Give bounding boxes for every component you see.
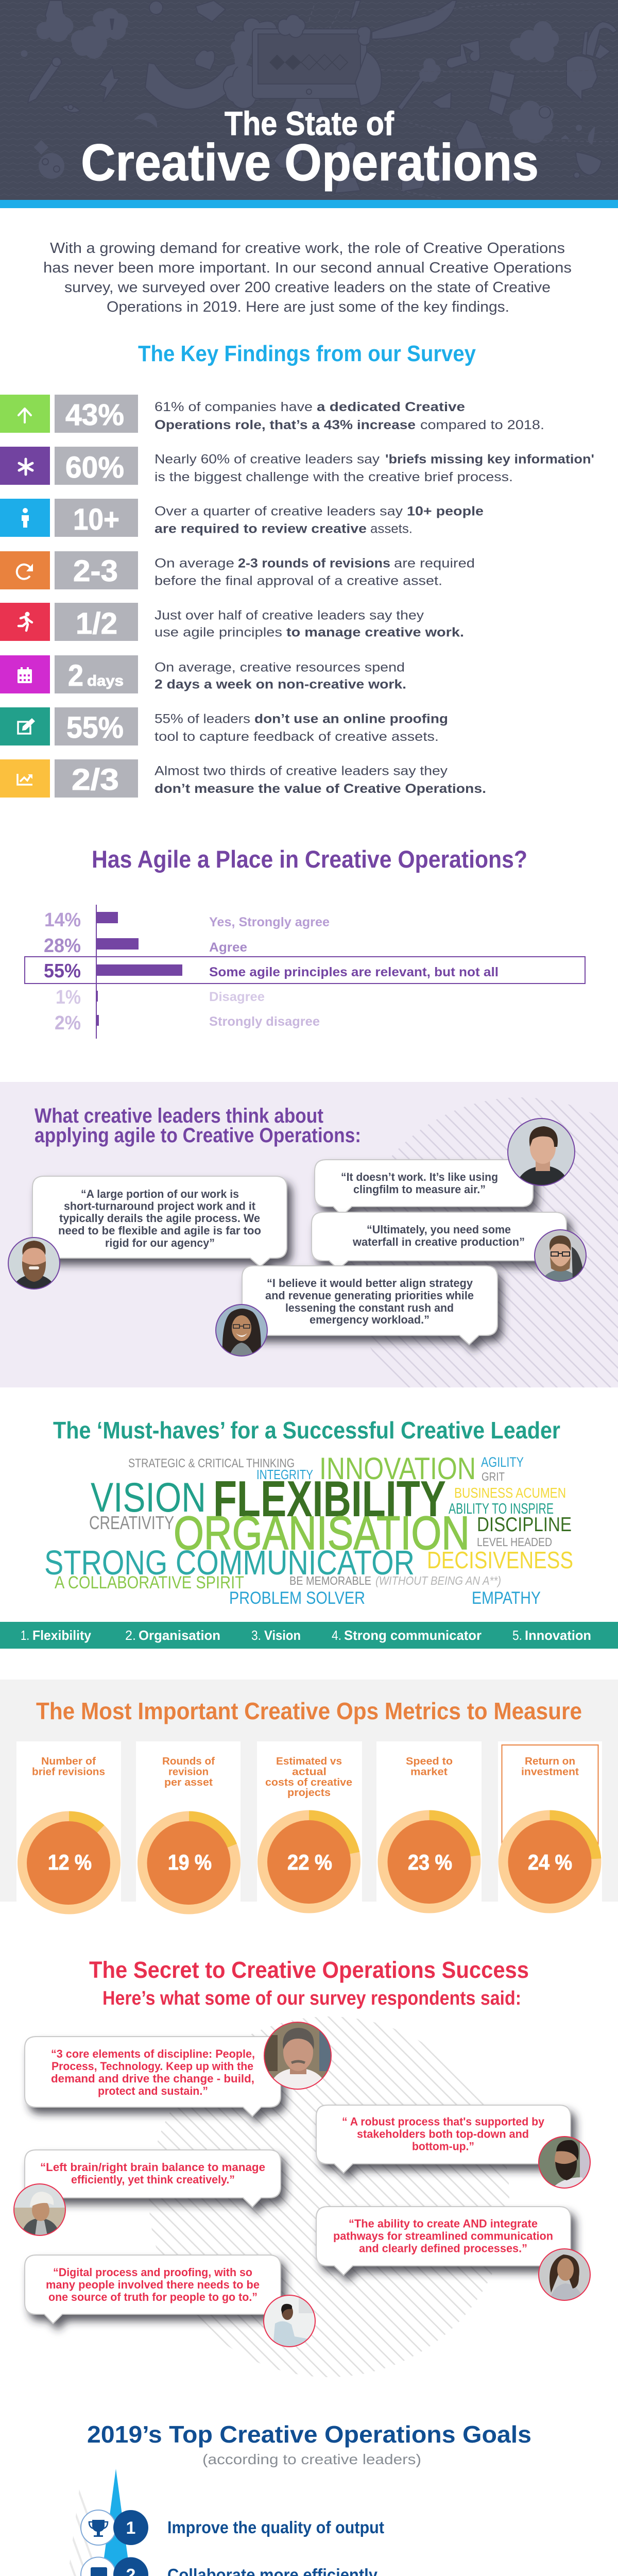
heading: secret to success: The Secret to Creative Operations Success — [89, 1957, 529, 1983]
metric: speed to market: Speed to — [406, 1756, 453, 1767]
finding 6: 2 — [68, 659, 83, 692]
quote bubble: digital process: one source of truth for people to go to.” — [48, 2291, 258, 2303]
portrait: man in cap — [14, 2184, 65, 2235]
metric: rounds of revision: revision — [168, 1766, 209, 1777]
finding 4: 2-3 rounds of revisions — [238, 556, 390, 571]
ranking bar: 5. — [512, 1628, 522, 1643]
finding 6: On average, creative resources spend — [154, 660, 405, 675]
quote bubble: discipline: Process, Technology. Keep up with the — [52, 2060, 253, 2073]
icon: up arrow — [0, 395, 50, 433]
finding 5: Just over half of creative leaders say they — [154, 608, 424, 622]
finding 4: before the final approval of a creative asset. — [154, 574, 442, 588]
finding 1: compared to 2018. — [420, 418, 544, 432]
finding 5: 1/2 — [76, 607, 117, 640]
word cloud: FLEXIBILITY — [213, 1470, 446, 1527]
dashed connector lines — [309, 4, 617, 198]
metric: estimated vs actual: costs of creative — [265, 1777, 352, 1788]
heading: goals: 2019’s Top Creative Operations Goals — [87, 2421, 531, 2448]
quote bubble: discipline — [25, 2037, 281, 2116]
panel heading: applying agile to Creative Operations: — [35, 1124, 361, 1147]
quote bubble: digital process: “Digital process and proofing, with so — [53, 2266, 252, 2279]
portrait: older man — [264, 2022, 332, 2090]
quote bubble: create and integrate: pathways for streamlined communication — [333, 2230, 553, 2242]
word cloud — [44, 1451, 573, 1608]
word cloud: (WITHOUT BEING AN A**) — [375, 1574, 501, 1587]
ranking bar: Flexibility — [32, 1628, 92, 1643]
portrait: curly-haired woman — [539, 2249, 590, 2300]
finding 1: Operations role, that’s a 43% increase — [154, 418, 416, 432]
quote bubble: clingfilm: clingfilm to measure air.” — [353, 1183, 486, 1196]
highlight box — [25, 957, 585, 984]
finding 4: On average — [154, 556, 234, 571]
metric: return on investment: 24 % — [528, 1850, 572, 1874]
ranking bar: Innovation — [525, 1628, 591, 1643]
word cloud: CREATIVITY — [89, 1512, 174, 1533]
finding 2: Nearly 60% of creative leaders say — [154, 452, 380, 467]
metric: estimated vs actual — [257, 1741, 362, 1913]
ranking bar: 3. — [251, 1628, 261, 1643]
quote bubble: clingfilm: “It doesn’t work. It’s like using — [341, 1171, 498, 1183]
metric cards — [16, 1741, 602, 1914]
panel: leaders on agile — [0, 1082, 618, 1387]
bar chart: agile: 55% — [44, 960, 81, 982]
finding 8: don’t measure the value of Creative Operations. — [154, 782, 486, 796]
icon: person — [0, 499, 50, 537]
header doodle illustrations — [21, 1, 617, 193]
finding 1: 61% of companies have — [154, 400, 313, 414]
ranking bar: 2. — [125, 1628, 136, 1643]
goal 1: Improve the quality of output — [167, 2518, 384, 2537]
metric: brief revisions — [16, 1741, 121, 1914]
quote bubble: strategy: “I believe it would better align strategy — [267, 1277, 473, 1290]
quote bubble: create and integrate: “The ability to create AND integrate — [349, 2217, 538, 2230]
finding 4: 2-3 — [73, 554, 118, 588]
quote bubble: waterfall: waterfall in creative production” — [352, 1235, 525, 1248]
quote bubble: waterfall — [312, 1212, 566, 1269]
goals list — [81, 2510, 550, 2576]
finding 7 — [0, 707, 448, 745]
word cloud: AGILITY — [481, 1454, 524, 1470]
icon: line chart — [0, 759, 50, 798]
bar chart: agile: Strongly disagree — [209, 1014, 320, 1029]
word cloud: BE MEMORABLE — [289, 1574, 371, 1587]
finding 8: 2/3 — [72, 763, 119, 796]
heading: agile: Has Agile a Place in Creative Operations? — [92, 845, 527, 873]
metric: rounds of revision: Rounds of — [162, 1756, 215, 1767]
portrait: man with glasses — [535, 1230, 586, 1281]
word cloud: INTEGRITY — [256, 1467, 313, 1482]
panel heading — [35, 1105, 361, 1147]
finding 5: to manage creative work. — [286, 625, 464, 640]
bar chart: agile: 1% — [56, 987, 81, 1008]
bar chart: agile: Disagree — [209, 990, 265, 1004]
word cloud: A COLLABORATIVE SPIRIT — [55, 1573, 244, 1592]
finding 2: 60% — [65, 451, 124, 484]
ranking bar: 1. — [21, 1628, 29, 1643]
quote bubble: discipline: “3 core elements of discipline: People, — [51, 2047, 255, 2060]
metric: return on investment: investment — [521, 1766, 579, 1777]
quote bubble: short turnaround: rigid for our agency” — [105, 1236, 215, 1249]
metric: estimated vs actual: 22 % — [287, 1850, 332, 1874]
goal 1 — [81, 2510, 384, 2545]
subheading: goals: (according to creative leaders) — [202, 2451, 421, 2467]
metric: rounds of revision: per asset — [164, 1777, 213, 1788]
portrait: dark bearded man — [539, 2137, 590, 2190]
finding 6 — [0, 655, 406, 693]
quote bubble: strategy: lessening the constant rush and — [285, 1301, 454, 1314]
bar chart: agile: 28% — [44, 935, 81, 957]
blue band — [0, 200, 618, 208]
ranking bar: Vision — [264, 1628, 301, 1643]
quote bubble: left brain right brain: “Left brain/right brain balance to manage — [40, 2161, 265, 2174]
metric: rounds of revision: 19 % — [168, 1850, 212, 1874]
portrait: person at desk — [264, 2295, 316, 2347]
intro paragraph: Operations in 2019. Here are just some of the key findings. — [107, 299, 509, 315]
word cloud: EMPATHY — [472, 1588, 541, 1608]
quote bubble: clingfilm — [315, 1160, 533, 1216]
finding 5: use agile principles — [154, 625, 282, 640]
quote bubble: create and integrate: and clearly defined processes.” — [359, 2242, 527, 2255]
metric: speed to market: market — [410, 1766, 448, 1777]
quote bubble: robust process: bottom-up.” — [412, 2140, 474, 2153]
striped circle backdrop — [149, 2016, 509, 2377]
heading: metrics: The Most Important Creative Ops Metrics to Measure — [36, 1698, 582, 1724]
intro paragraph: With a growing demand for creative work, the role of Creative Operations — [50, 240, 565, 257]
word cloud: STRONG COMMUNICATOR — [44, 1544, 415, 1582]
bar chart: agile: 2% — [55, 1012, 81, 1034]
metric: brief revisions: 12 % — [48, 1850, 92, 1874]
portrait: young man — [507, 1118, 575, 1186]
finding 3: Over a quarter of creative leaders say — [154, 504, 403, 518]
finding 3 — [0, 499, 484, 537]
word cloud: STRATEGIC & CRITICAL THINKING — [128, 1456, 295, 1470]
icon: refresh — [0, 551, 50, 589]
panel heading: What creative leaders think about — [35, 1105, 323, 1127]
word cloud: INNOVATION — [319, 1451, 476, 1486]
metric: speed to market — [376, 1741, 482, 1913]
bar chart: agile: Agree — [209, 940, 247, 955]
finding 6: days — [87, 673, 124, 689]
metric: estimated vs actual: actual — [292, 1766, 327, 1777]
ranking bar — [0, 1622, 618, 1649]
quote bubble: short turnaround: need to be flexible and agile is far too — [58, 1224, 261, 1237]
quote bubble: robust process — [316, 2105, 571, 2173]
finding 4: are required — [394, 556, 475, 571]
finding 2 — [0, 447, 594, 485]
metric: estimated vs actual: projects — [287, 1787, 331, 1799]
heading: must-haves: The ‘Must-haves’ for a Successful Creative Leader — [53, 1417, 560, 1444]
bar chart: agile: Some agile principles are relevant, but not all — [209, 965, 499, 979]
panel: metrics background — [0, 1680, 618, 1902]
bar chart: agile: 14% — [44, 909, 81, 931]
quote bubble: short turnaround: “A large portion of our work is — [81, 1188, 239, 1200]
ranking bar: Organisation — [139, 1628, 220, 1643]
finding 3: assets. — [370, 522, 413, 536]
quote bubble: discipline: demand and drive the change - build, — [51, 2072, 254, 2085]
icon: calendar — [0, 655, 50, 693]
blue pyramid — [64, 2469, 168, 2576]
heading: secret to success — [89, 1957, 529, 2009]
quote bubble: robust process: “ A robust process that's supported by — [342, 2115, 545, 2128]
finding 7: don’t use an online proofing — [254, 712, 448, 726]
ranking bar: 4. — [332, 1628, 341, 1643]
goal 2 — [81, 2557, 378, 2576]
word cloud: LEVEL HEADED — [477, 1535, 552, 1549]
icon: speech bubble — [81, 2557, 116, 2576]
word cloud: ORGANISATION — [174, 1507, 470, 1560]
metric: estimated vs actual: Estimated vs — [276, 1756, 342, 1767]
quote bubble: strategy — [242, 1266, 497, 1345]
quote bubble: left brain right brain — [25, 2150, 281, 2207]
metric: return on investment — [498, 1741, 602, 1913]
finding 3: 10+ people — [407, 504, 484, 518]
metric: brief revisions: brief revisions — [32, 1766, 105, 1777]
intro paragraph: has never been more important. In our second annual Creative Operations — [43, 260, 572, 276]
title line two: Creative Operations — [81, 134, 539, 192]
quote bubble: short turnaround: short-turnaround project work and it — [64, 1199, 256, 1213]
quote bubble: left brain right brain: efficiently, yet think creatively.” — [71, 2173, 235, 2186]
word cloud: VISION — [91, 1475, 206, 1521]
metric: speed to market: 23 % — [408, 1850, 452, 1874]
icon: trophy — [81, 2510, 116, 2545]
quote bubble: digital process — [25, 2255, 281, 2324]
word cloud: ABILITY TO INSPIRE — [449, 1501, 554, 1517]
header banner — [0, 0, 618, 200]
metric: brief revisions: Number of — [41, 1756, 96, 1767]
finding 3: are required to review creative — [154, 522, 367, 536]
portrait: bearded man — [8, 1238, 60, 1289]
quote bubble: robust process: stakeholders both top-down and — [357, 2128, 529, 2140]
word cloud: PROBLEM SOLVER — [229, 1588, 365, 1608]
word cloud: DECISIVENESS — [427, 1547, 573, 1573]
quote bubble: create and integrate — [316, 2207, 571, 2275]
word cloud: DISCIPLINE — [477, 1514, 572, 1536]
word cloud: GRIT — [482, 1470, 505, 1483]
finding 1: 43% — [65, 398, 124, 432]
portrait: woman with glasses — [216, 1304, 267, 1356]
bar chart: agile: Yes, Strongly agree — [209, 915, 330, 929]
quote bubble: strategy: and revenue generating priorities while — [265, 1289, 474, 1302]
bar chart: agile — [25, 905, 585, 1039]
finding 8 — [0, 759, 486, 798]
intro paragraph — [43, 240, 572, 315]
finding 5 — [0, 603, 464, 641]
title line one: The State of — [225, 105, 394, 142]
finding 6: 2 days a week on non-creative work. — [154, 677, 406, 692]
finding 7: 55% — [66, 711, 124, 744]
finding 1 — [0, 395, 544, 433]
word cloud: BUSINESS ACUMEN — [454, 1485, 566, 1501]
stripes behind pyramid — [15, 2477, 154, 2576]
metric: return on investment: Return on — [525, 1756, 575, 1767]
finding 1: a dedicated Creative — [317, 400, 465, 414]
quote bubble: strategy: emergency workload.” — [310, 1313, 430, 1326]
finding 3: 10+ — [73, 503, 119, 536]
key findings list — [0, 395, 594, 798]
finding 7: 55% of leaders — [154, 712, 250, 726]
finding 2: 'briefs missing key information' — [385, 452, 594, 467]
quote bubble: digital process: many people involved there needs to be — [46, 2278, 260, 2291]
icon: edit pencil — [0, 707, 50, 745]
finding 8: Almost two thirds of creative leaders say they — [154, 764, 448, 778]
respondent quotes — [14, 2022, 590, 2347]
icon: runner — [0, 603, 50, 641]
goal 1: 1 — [126, 2518, 135, 2538]
icon: asterisk — [0, 447, 50, 485]
quote bubble: discipline: protect and sustain.” — [98, 2084, 208, 2097]
finding 2: is the biggest challenge with the creative brief process. — [154, 470, 513, 484]
metric: rounds of revision — [136, 1741, 241, 1914]
quote bubble: short turnaround — [32, 1176, 287, 1267]
quote bubble: short turnaround: typically derails the agile process. We — [59, 1212, 260, 1225]
finding 7: tool to capture feedback of creative assets. — [154, 730, 439, 744]
quote bubble: waterfall: “Ultimately, you need some — [367, 1223, 511, 1236]
finding 4 — [0, 551, 475, 589]
intro paragraph: survey, we surveyed over 200 creative leaders on the state of Creative — [64, 279, 551, 296]
heading: secret to success: Here’s what some of our survey respondents said: — [102, 1988, 521, 2009]
heading: key findings: The Key Findings from our Survey — [138, 341, 476, 366]
ranking bar: Strong communicator — [344, 1628, 482, 1643]
monitor screen diamonds — [269, 55, 348, 70]
